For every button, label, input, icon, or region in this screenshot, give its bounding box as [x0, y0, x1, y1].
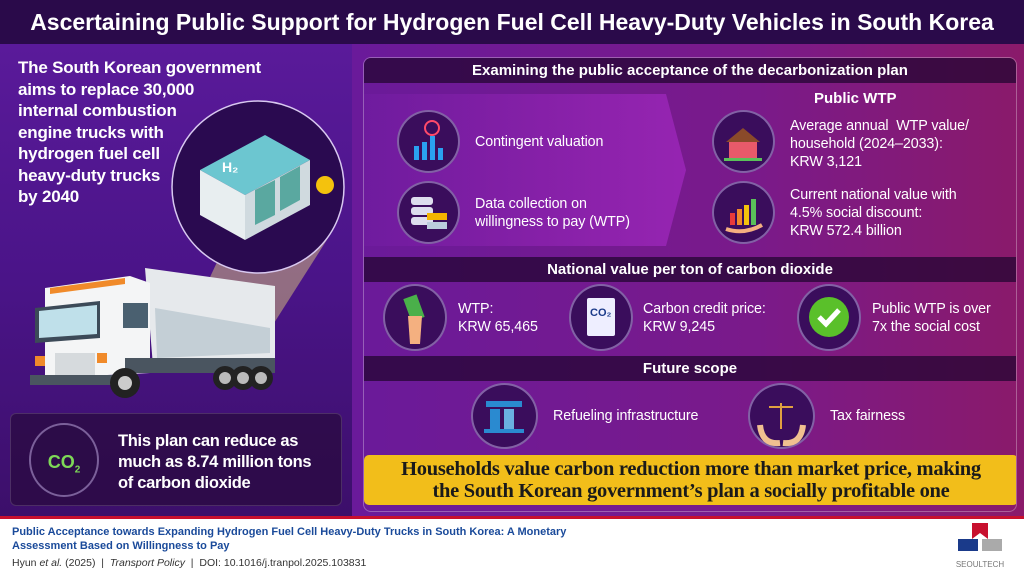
conclusion banner: [364, 455, 1018, 505]
footer citation: Hyun et al. (2025) | Transport Policy | DOI: 10.1016/j.tranpol.2025.103831: [12, 557, 366, 569]
text: average WTP: household (2024–2033):: [790, 136, 943, 152]
text: average WTP: KRW 3,121: [790, 154, 862, 170]
icon: check: [797, 284, 861, 351]
heading: future scope: Future scope: [643, 360, 737, 377]
text: national value: KRW 572.4 billion: [790, 223, 902, 239]
text: WTP value: KRW 65,465: [458, 319, 538, 335]
text: average WTP: Average annual WTP value/: [790, 118, 969, 134]
background left: [0, 44, 352, 518]
heading: national value per ton: [364, 257, 1016, 282]
text: data collection: willingness to pay (WTP): [475, 214, 630, 230]
text: public WTP over: 7x the social cost: [872, 319, 980, 335]
intro text: internal combustion: [18, 101, 177, 120]
text: data collection: Data collection on: [475, 196, 587, 212]
icon: station: [471, 383, 538, 449]
icon: database: [397, 181, 460, 244]
icon: money: [383, 284, 447, 351]
icon: CO2 down arrow: CO2: [48, 452, 80, 476]
heading: examining: [364, 58, 1016, 83]
text: contingent valuation: Contingent valuation: [475, 134, 603, 150]
text: tax fairness: Tax fairness: [830, 408, 905, 424]
icon: contingent valuation: [397, 110, 460, 173]
truck: [30, 268, 275, 398]
intro text: The South Korean government: [18, 58, 261, 77]
logo: SeoulTech: [956, 523, 1004, 569]
icon: CO2 down arrow: [29, 423, 99, 497]
heading: examining: Examining the public acceptance of the decarbonization plan: [472, 62, 908, 79]
icon: CO2 clipboard: [569, 284, 633, 351]
footer citation: [12, 526, 566, 569]
intro text: hydrogen fuel cell: [18, 144, 160, 163]
text: WTP value: [458, 301, 538, 335]
icon: house: [712, 110, 775, 173]
heading: public WTP: Public WTP: [814, 90, 896, 107]
intro text: engine trucks with: [18, 122, 164, 142]
background right: [352, 44, 1024, 518]
illustration: fuel cell in circle with light beam: H₂: [222, 159, 238, 175]
arrow band: [402, 94, 686, 246]
text: national value: Current national value with: [790, 187, 957, 203]
callout: CO2 reduction: [10, 413, 342, 506]
text: carbon credit: Carbon credit price:: [643, 301, 766, 317]
text: carbon credit: KRW 9,245: [643, 319, 715, 335]
conclusion banner: the South Korean government’s plan a socially profitable one: [433, 480, 949, 502]
text: average WTP: [790, 118, 969, 170]
icon: growth chart: [712, 181, 775, 244]
heading: national value per ton: National value per ton of carbon dioxide: [547, 261, 833, 278]
intro text: aims to replace 30,000: [18, 80, 194, 98]
text: WTP value: WTP:: [458, 301, 493, 317]
illustration: fuel cell in circle with light beam: [171, 100, 345, 322]
icon: CO2 clipboard: CO₂: [590, 307, 612, 319]
intro text: heavy-duty trucks: [18, 166, 160, 184]
title bar: Ascertaining Public Support for Hydrogen Fuel Cell Heavy-Duty Vehicles in South Korea: [30, 9, 994, 35]
footer citation: Public Acceptance towards Expanding Hydrogen Fuel Cell Heavy-Duty Trucks in South Korea: A Monetary: [12, 526, 566, 538]
intro text: [18, 58, 261, 206]
title bar: [0, 0, 1024, 44]
icon: scale: [748, 383, 815, 449]
heading: future scope: [364, 356, 1016, 381]
callout text: of carbon dioxide: [118, 474, 250, 492]
footer red line: [0, 516, 1024, 519]
text: refueling: Refueling infrastructure: [553, 408, 698, 424]
text: data collection: [475, 196, 630, 230]
logo: SeoulTech: SEOULTECH: [956, 560, 1004, 569]
text: national value: [790, 187, 957, 239]
callout text: This plan can reduce as: [118, 432, 298, 450]
panel: right main: [363, 57, 1017, 512]
text: public WTP over: Public WTP is over: [872, 301, 991, 317]
footer citation: Assessment Based on Willingness to Pay: [12, 540, 230, 552]
callout text: much as 8.74 million tons: [118, 453, 311, 471]
callout text: [118, 432, 311, 492]
text: carbon credit: [643, 301, 766, 335]
intro text: by 2040: [18, 187, 79, 206]
text: public WTP over: [872, 301, 991, 335]
conclusion banner: Households value carbon reduction more than market price, making: [401, 458, 981, 480]
text: national value: 4.5% social discount:: [790, 205, 922, 221]
